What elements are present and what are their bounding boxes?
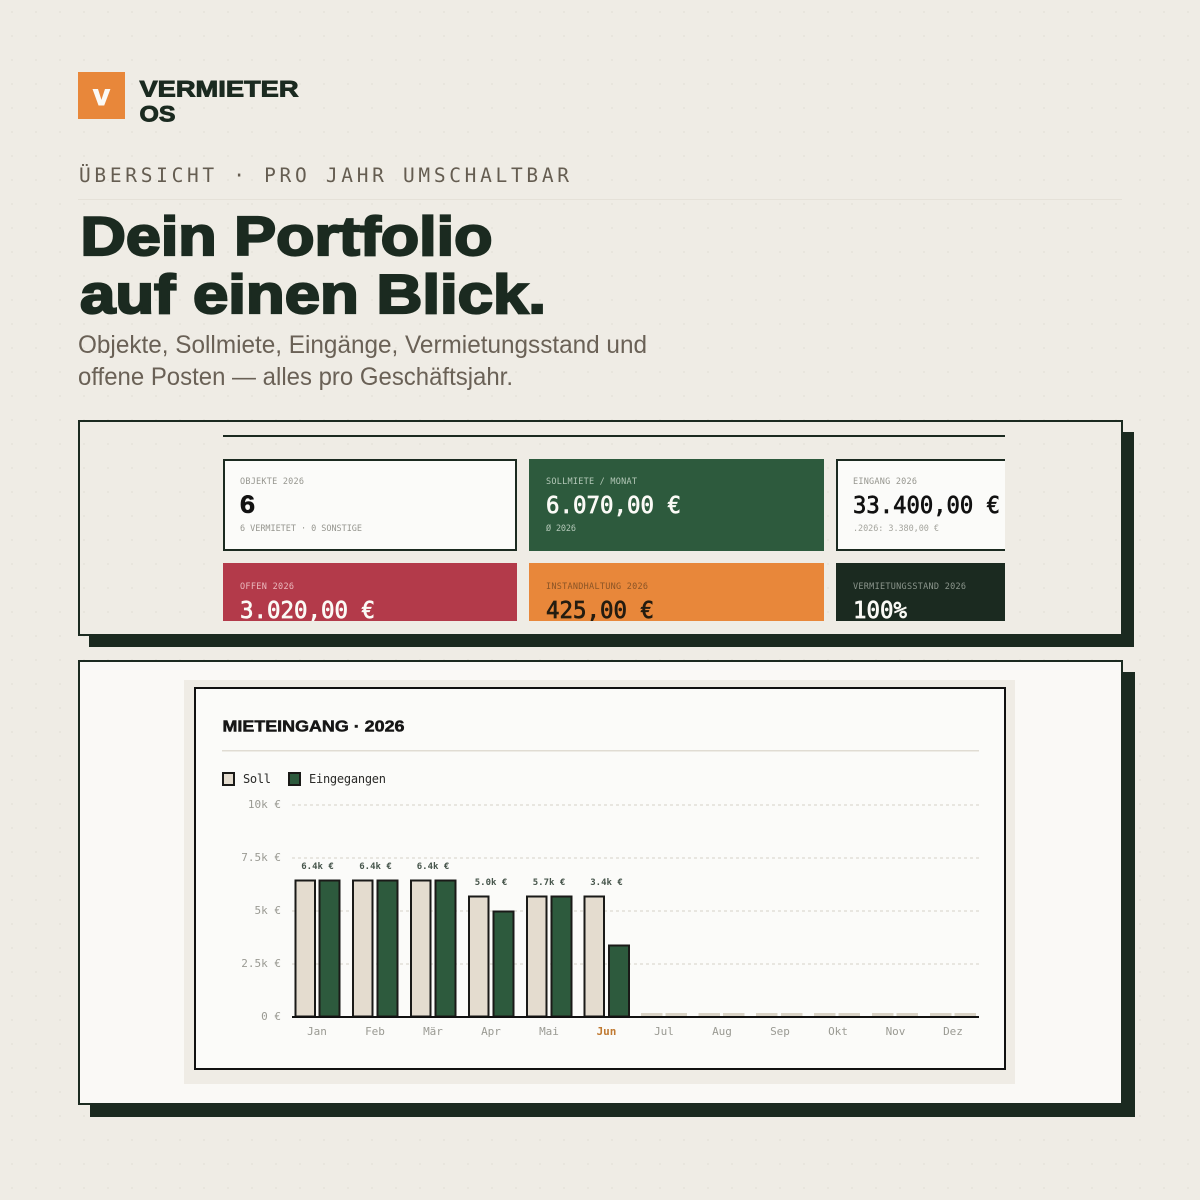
card: Vermietungsstand: 100% — [853, 598, 907, 624]
value labels: 3.4k € — [590, 878, 623, 888]
card: Objekte — [224, 460, 516, 550]
month labels: Mai — [539, 1025, 559, 1038]
legend — [223, 772, 386, 786]
legend: Soll — [243, 772, 271, 786]
month labels: Apr — [481, 1025, 501, 1038]
card: Objekte: OBJEKTE 2026 — [240, 477, 304, 487]
month labels: Jul — [654, 1025, 674, 1038]
month labels: Dez — [943, 1025, 963, 1038]
month labels: Feb — [365, 1025, 385, 1038]
value labels: 5.7k € — [533, 878, 565, 888]
value labels: 6.4k € — [301, 862, 334, 872]
card: Eingang: .2026: 3.380,00 € — [853, 524, 939, 534]
icon: logo square — [78, 72, 125, 119]
value labels: 6.4k € — [417, 862, 449, 872]
card: Sollmiete — [529, 459, 824, 551]
value labels — [301, 862, 623, 888]
card: Eingang: EINGANG 2026 — [853, 477, 917, 487]
chart title: MIETEINGANG · 2026 — [222, 718, 405, 736]
brand name: VERMIETER — [140, 76, 298, 102]
icon: logo square: v — [93, 79, 110, 112]
card: Instandhaltung: INSTANDHALTUNG 2026 — [546, 582, 648, 592]
card: Vermietungsstand: VERMIETUNGSSTAND 2026 — [853, 582, 966, 592]
card: Eingang: 33.400,00 € — [853, 493, 1000, 519]
brand name — [140, 76, 298, 126]
bar chart — [241, 798, 979, 1038]
subtitle — [78, 331, 647, 391]
subtitle: Objekte, Sollmiete, Eingänge, Vermietungsstand und — [78, 331, 647, 359]
card: Instandhaltung — [529, 563, 824, 624]
value labels: 6.4k € — [359, 862, 392, 872]
month labels: Mär — [423, 1025, 443, 1038]
bars — [296, 880, 976, 1017]
y axis labels: 2.5k € — [241, 957, 281, 970]
brand name: OS — [140, 102, 176, 126]
month labels: Okt — [828, 1025, 848, 1038]
card: Eingang — [837, 460, 1027, 550]
logo — [78, 72, 298, 126]
card: Vermietungsstand — [836, 563, 1005, 624]
panel: Mieteingang chart — [79, 661, 1135, 1117]
card: Instandhaltung: 425,00 € — [546, 598, 654, 624]
y axis labels: 0 € — [261, 1010, 281, 1023]
title: auf einen Blick. — [80, 263, 546, 325]
card: Sollmiete: SOLLMIETE / MONAT — [546, 477, 637, 487]
month labels — [307, 1025, 963, 1038]
panel: KPI cards — [79, 421, 1134, 647]
month labels: Jun — [597, 1025, 616, 1038]
card: Sollmiete: 6.070,00 € — [546, 493, 681, 519]
y axis labels — [241, 798, 281, 1023]
card: Objekte: 6 VERMIETET · 0 SONSTIGE — [240, 524, 362, 534]
title: Dein Portfolio — [80, 205, 492, 267]
value labels: 5.0k € — [475, 878, 507, 888]
legend: Eingegangen — [309, 772, 386, 786]
y axis labels: 10k € — [248, 798, 281, 811]
y axis labels: 7.5k € — [241, 851, 281, 864]
title — [80, 205, 546, 325]
subtitle: offene Posten — alles pro Geschäftsjahr. — [78, 363, 513, 391]
y axis labels: 5k € — [254, 904, 281, 917]
card: Sollmiete: Ø 2026 — [546, 523, 576, 534]
eyebrow: ÜBERSICHT · PRO JAHR UMSCHALTBAR — [79, 164, 569, 187]
card: Offen — [223, 563, 517, 624]
month labels: Aug — [712, 1025, 732, 1038]
card: Offen: OFFEN 2026 — [240, 582, 294, 592]
month labels: Sep — [770, 1025, 790, 1038]
card: Objekte: 6 — [240, 491, 255, 519]
card: Offen: 3.020,00 € — [240, 598, 375, 624]
month labels: Nov — [886, 1025, 906, 1038]
month labels: Jan — [307, 1025, 327, 1038]
